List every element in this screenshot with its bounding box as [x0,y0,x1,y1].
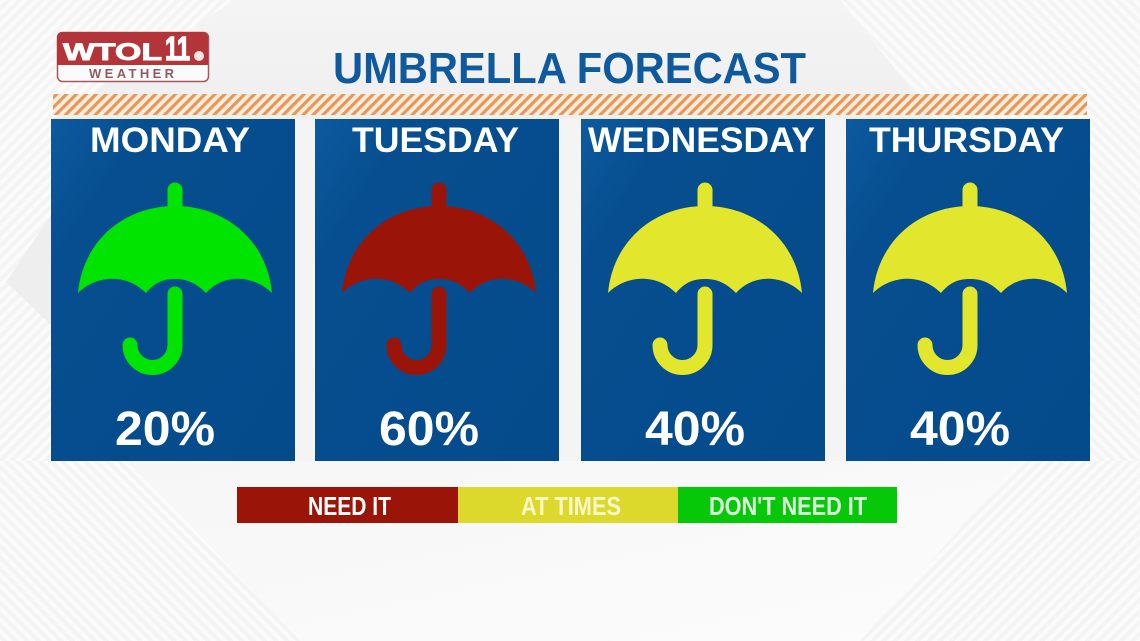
panel: Monday [51,119,295,461]
heading: Wednesday: WEDNESDAY [588,121,815,160]
panel: Wednesday [581,119,825,461]
legend: need it [237,487,458,523]
icon: yellow umbrella [608,190,802,368]
hatched divider band [53,94,1087,115]
legend: don't need it: DON'T NEED IT [709,491,867,521]
legend: need it: NEED IT [308,491,391,521]
panel: Thursday [846,119,1090,461]
logo [57,30,208,82]
title: UMBRELLA FORECAST [333,44,806,93]
logo subtitle: WEATHER [89,66,175,81]
value: 40%: 40% [910,403,1010,456]
logo registered mark [194,51,204,61]
icon: yellow umbrella [873,190,1067,368]
logo wordmark: WTOL [63,39,162,66]
heading: Tuesday: TUESDAY [352,121,519,160]
legend: at times [458,487,678,523]
heading: Monday: MONDAY [90,121,250,160]
logo channel number: 11 [165,30,190,67]
value: 20%: 20% [115,403,215,456]
panel: Tuesday [315,119,559,461]
legend [237,487,897,523]
icon: green umbrella [78,190,272,368]
icon: red umbrella [342,190,536,368]
legend: at times: AT TIMES [521,491,621,521]
value: 40%: 40% [645,403,745,456]
value: 60%: 60% [379,403,479,456]
heading: Thursday: THURSDAY [869,121,1064,160]
